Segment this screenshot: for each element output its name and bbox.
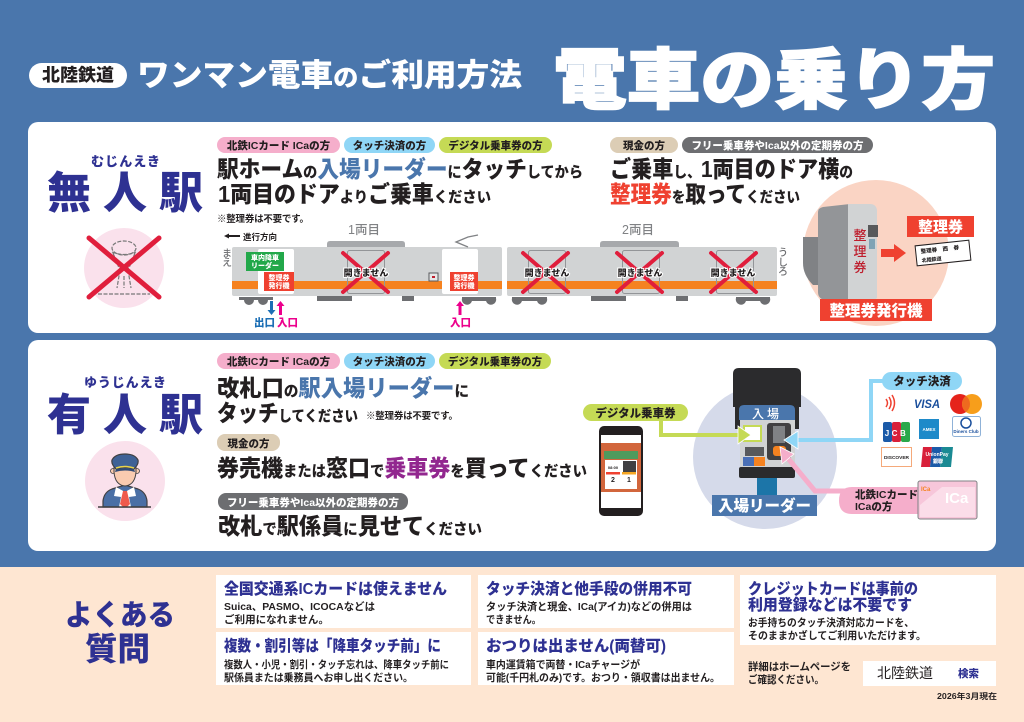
rear label (778, 247, 788, 278)
tag: ICa (217, 353, 340, 369)
FAQ: no change given: おつりは出ません(両替可) (486, 636, 666, 655)
heading: unstaffed station: 無人駅 (47, 169, 203, 218)
heading: FAQ (65, 600, 175, 667)
front label (222, 248, 232, 269)
FAQ: no change given (478, 632, 734, 685)
callout: ICa card (780, 447, 977, 519)
label: ticket machine front: 発行機 (268, 281, 290, 290)
FAQ: national IC cards: 全国交通系ICカードは使えません (224, 579, 447, 598)
operator pill: 北陸鉄道 (42, 65, 115, 85)
smartphone: 08:00 (608, 465, 619, 470)
label: ticket machine rear: 発行機 (454, 281, 474, 290)
note: no ticket required: ※整理券は不要です。 (217, 213, 309, 225)
ticket machine illustration: 整 (853, 228, 867, 243)
icon: American Express: AMEX (922, 427, 936, 432)
operator pill (29, 63, 127, 88)
car 2 (507, 241, 777, 305)
instruction: touch the gate reader: 改札口の駅入場リーダーに (217, 375, 469, 401)
direction of travel: 進行方向 (243, 232, 277, 242)
entry reader illustration (693, 368, 837, 529)
instruction: touch the gate reader (217, 375, 469, 426)
subtitle: ワンマン電車 のご利用方法 (137, 58, 522, 93)
search box: 北陸鉄道 (877, 665, 933, 681)
label: on-board reader: 車内降車 (251, 253, 279, 262)
car 2: 開きません (525, 268, 569, 278)
icon: Visa: VISA (914, 399, 940, 411)
icon: Discover: DISCOVER (884, 455, 910, 461)
FAQ: group and discount: 駅係員または乗務員へお申し出ください。 (224, 671, 413, 684)
ticket machine illustration (803, 180, 974, 326)
icon: contactless (886, 395, 894, 411)
car 1 (232, 241, 502, 305)
instruction: touch the reader: 1両目のドアよりご乗車ください (218, 181, 491, 207)
icon: Mastercard (950, 394, 982, 414)
front label: え (222, 257, 232, 269)
date note: 2026年3月現在 (937, 691, 997, 701)
instruction: buy a ticket: 券売機または窓口で乗車券を買ってください (217, 455, 587, 481)
ticket machine illustration: 理 (853, 244, 867, 259)
tag: cash (217, 434, 280, 451)
label: exit: 出口 (254, 316, 275, 329)
rear label: し (778, 257, 788, 269)
FAQ: group and discount (216, 632, 471, 685)
tag: ICa: 北鉄ICカード ICaの方 (227, 355, 331, 368)
arrow: exit (268, 301, 276, 315)
tag: other passes: フリー乗車券やIca以外の定期券の方 (227, 496, 400, 509)
ticket machine illustration: 券 (853, 260, 867, 275)
label: ticket: 整理券 (918, 218, 963, 236)
tag: cash (610, 137, 678, 153)
smartphone: 1 (627, 477, 631, 484)
label: ticket machine (820, 299, 932, 321)
tag: other passes: フリー乗車券やIca以外の定期券の方 (691, 139, 864, 152)
callout: digital ticket: デジタル乗車券 (595, 406, 676, 420)
tag: digital ticket: デジタル乗車券の方 (448, 139, 543, 152)
heading: FAQ: よくある (65, 600, 175, 632)
car 1: 開きません (344, 268, 388, 278)
details note (748, 660, 851, 686)
arrow: entrance rear (456, 301, 464, 315)
callout: touch payment: タッチ決済 (893, 374, 951, 388)
label: ticket machine rear (450, 272, 478, 291)
rear label: う (778, 247, 788, 259)
car labels (348, 223, 654, 237)
ruby: mujin-eki: むじんえき (91, 154, 160, 169)
rear label: ろ (778, 266, 788, 278)
icon: Diners Club: Diners Club (953, 429, 979, 434)
callout: ICa card: 北鉄ICカード (855, 488, 918, 501)
ticket: 北陸鉄道 (921, 255, 942, 264)
FAQ: national IC cards (216, 575, 471, 628)
FAQ: credit card registration: お手持ちのタッチ決済対応カードを、 (748, 616, 914, 629)
ruby: yujin-eki: ゆうじんえき (84, 375, 166, 390)
FAQ: touch payment combination (478, 575, 734, 628)
instruction: take a ticket: ご乗車し、1両目のドア横の (610, 156, 853, 182)
FAQ: touch payment combination: できません。 (486, 614, 541, 626)
smartphone (599, 426, 643, 516)
main title: 電車の乗り方 (553, 43, 995, 117)
note: no ticket required: ※整理券は不要です。 (366, 410, 458, 422)
car 2: 開きません (618, 268, 662, 278)
details note: ご確認ください。 (748, 673, 824, 686)
arrow: ticket (881, 244, 906, 262)
FAQ: touch payment combination: タッチ決済と現金、ICa(アイカ)などの併用は (486, 600, 692, 613)
details note: 詳細はホームページを (748, 660, 851, 673)
tag: other passes (218, 493, 408, 510)
label: entry reader: 入場リーダー (718, 496, 811, 515)
instruction: touch the reader (217, 156, 583, 207)
search box: 検索 (958, 667, 979, 680)
ICa card: ICa (945, 490, 969, 507)
panel: staffed station (28, 340, 996, 551)
instruction: touch the gate reader: タッチしてください (217, 400, 358, 426)
label: entrance: 入口 (277, 317, 298, 329)
callout: digital ticket (583, 404, 751, 444)
icon: UnionPay: 銀聯 (933, 458, 943, 465)
instruction: show to staff: 改札で駅係員に見せてください (218, 513, 482, 539)
car labels: 2両目 (622, 223, 654, 237)
icon: UnionPay (921, 447, 953, 467)
tag: touch payment (344, 137, 435, 153)
tag: other passes (682, 137, 873, 153)
tag: ICa (217, 137, 340, 153)
entry reader illustration: 入場 (752, 407, 782, 421)
label: on-board reader (246, 252, 284, 271)
FAQ: national IC cards: ご利用になれません。 (224, 613, 329, 626)
FAQ: credit card registration (740, 575, 996, 645)
label: ticket machine rear: 整理券 (454, 273, 474, 282)
tag: cash: 現金の方 (228, 437, 270, 450)
car labels: 1両目 (348, 223, 380, 237)
tag: digital ticket (439, 353, 551, 369)
search box (863, 661, 996, 686)
ICa card: ICa (921, 487, 931, 493)
tag: touch payment: タッチ決済の方 (353, 355, 427, 368)
ICa card (918, 481, 977, 519)
label: ticket machine front (264, 272, 294, 291)
icon: crossed-out staff (84, 228, 164, 308)
callout: ICa card: ICaの方 (855, 500, 893, 513)
instruction: touch the reader: 駅ホームの入場リーダーにタッチしてから (217, 156, 583, 182)
pantograph between cars (456, 235, 478, 247)
tag: cash: 現金の方 (623, 139, 665, 152)
callout: touch payment (784, 372, 962, 449)
FAQ: national IC cards: Suica、PASMO、ICOCAなどは (224, 600, 375, 613)
icon: JCB: JCB (885, 429, 908, 438)
label: ticket machine front: 整理券 (268, 273, 290, 282)
front label: ま (222, 248, 232, 260)
FAQ: credit card registration: そのままかざしてご利用いただけます。 (748, 629, 926, 642)
instruction: take a ticket (610, 156, 853, 207)
heading: staffed station: 有人駅 (47, 391, 203, 440)
tag: touch payment (344, 353, 435, 369)
car 2: 開きません (711, 268, 755, 278)
FAQ: no change given: 可能(千円札のみ)です。おつり・領収書は出ません。 (486, 671, 720, 684)
FAQ: group and discount: 複数人・小児・割引・タッチ忘れは、降車タッチ前に (224, 658, 449, 671)
arrow: entrance (276, 301, 284, 315)
ticket (915, 240, 971, 266)
instruction: take a ticket: 整理券を取ってください (610, 181, 800, 207)
payment brand icons (882, 394, 982, 467)
smartphone: 2 (611, 477, 615, 484)
label: on-board reader: リーダー (251, 261, 279, 270)
tag: digital ticket: デジタル乗車券の方 (448, 355, 543, 368)
icon: UnionPay: UnionPay (925, 452, 949, 458)
FAQ: credit card registration: 利用登録などは不要です (748, 595, 912, 614)
FAQ: touch payment combination: タッチ決済と他手段の併用不可 (486, 579, 692, 598)
icon: station staff (85, 441, 165, 521)
tag: digital ticket (439, 137, 552, 153)
panel: unstaffed station (28, 122, 996, 333)
tag: touch payment: タッチ決済の方 (353, 139, 427, 152)
FAQ: group and discount: 複数・割引等は「降車タッチ前」に (224, 636, 441, 655)
label: entrance rear: 入口 (450, 317, 471, 329)
label: ticket machine: 整理券発行機 (829, 301, 923, 320)
FAQ: no change given: 車内運賃箱で両替・ICaチャージが (486, 658, 640, 671)
direction of travel (224, 232, 277, 242)
header (29, 43, 995, 117)
FAQ: credit card registration: クレジットカードは事前の (748, 579, 918, 598)
band: FAQ (0, 567, 1024, 722)
train diagram (222, 223, 788, 329)
ticket: 整理券 西 券 (920, 243, 960, 255)
label: ticket (907, 216, 974, 237)
tag: ICa: 北鉄ICカード ICaの方 (227, 139, 331, 152)
heading: FAQ: 質問 (85, 631, 150, 667)
